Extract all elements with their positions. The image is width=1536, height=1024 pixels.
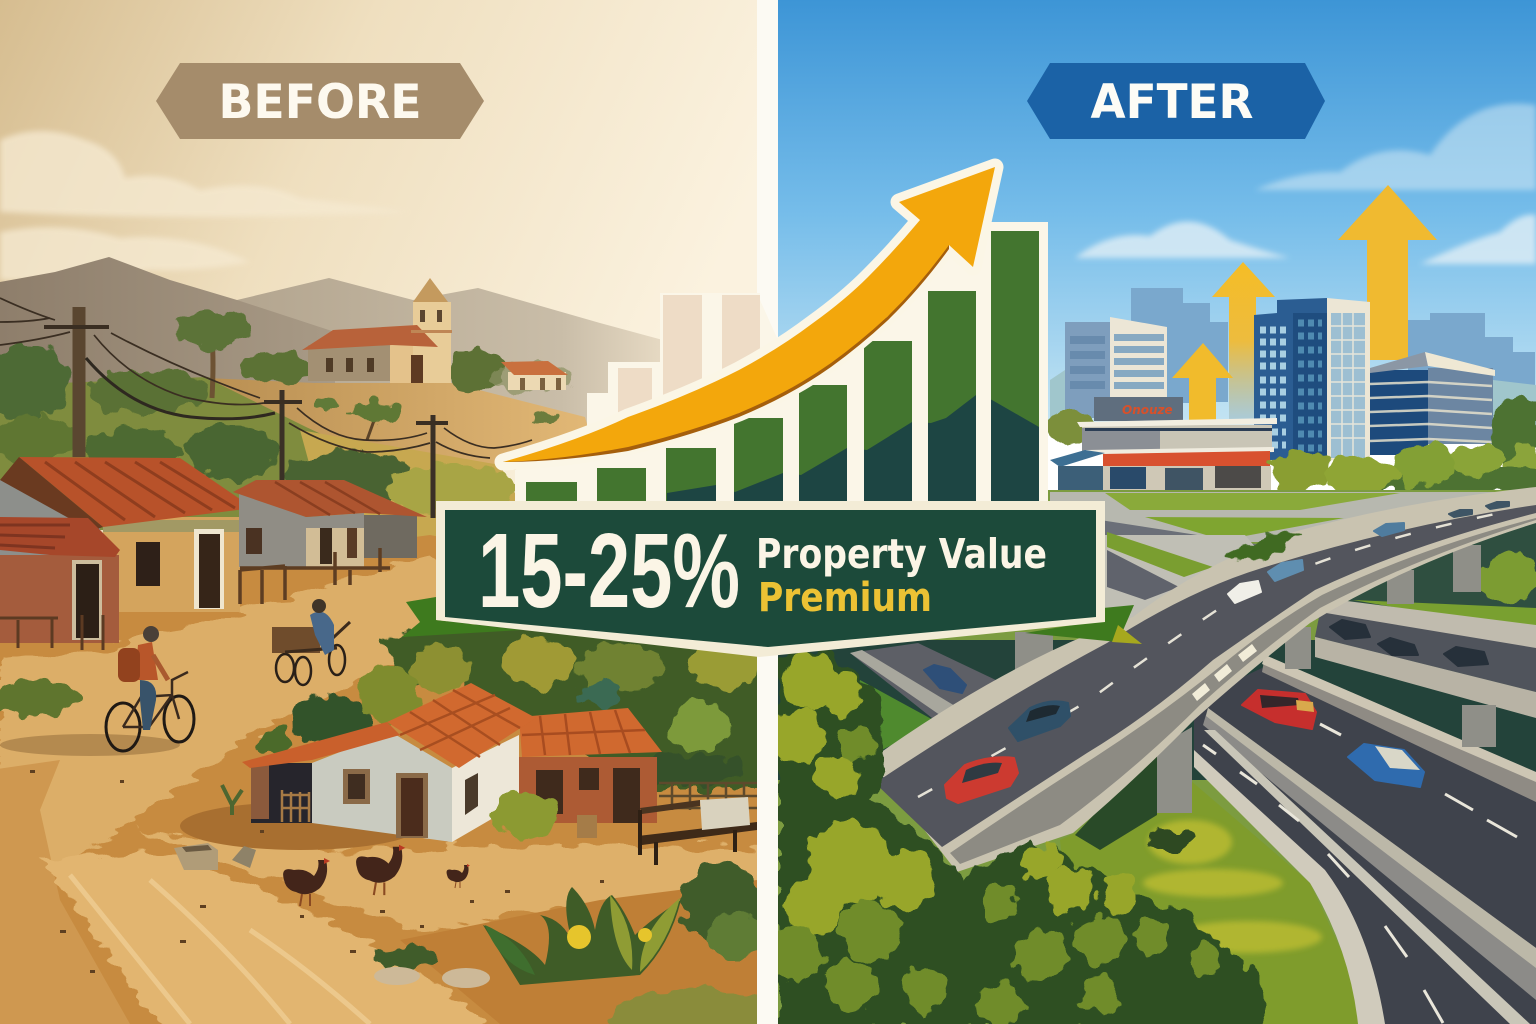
power lines and poles	[0, 298, 532, 518]
bush: corner shrubs	[373, 860, 790, 1024]
trough	[174, 843, 256, 870]
pillars	[1015, 545, 1496, 813]
house: brick annex	[519, 708, 662, 823]
panel: after scene	[767, 0, 1536, 1024]
dirt: cottage shadow	[180, 804, 404, 850]
shadow: under main pillar	[1075, 747, 1157, 850]
label: after: AFTER	[1090, 75, 1254, 130]
panel: before scene	[0, 0, 790, 1024]
bars: green	[526, 231, 1039, 503]
dirt: dark lower left shoulder	[0, 760, 130, 1024]
car: blue hatchback	[1348, 744, 1424, 787]
label: before	[156, 63, 484, 139]
flyover: median band	[950, 518, 1536, 864]
road: lower lane dashes	[1203, 724, 1517, 1023]
arrow: brown shadow edge	[503, 243, 949, 462]
specks: scattered dirt	[30, 770, 604, 973]
house: large stucco house	[0, 457, 253, 612]
median: lower stripe	[1204, 730, 1530, 1024]
road: right branch	[140, 830, 770, 930]
flyover: tiles	[1192, 644, 1257, 701]
bars: dark shaded lower area	[667, 395, 1039, 503]
chart: rising bars	[515, 222, 1048, 510]
cars: traffic	[924, 502, 1509, 803]
house: roadside house	[233, 480, 427, 604]
buildings: distant skyline	[1050, 288, 1536, 430]
hills and fields	[0, 377, 600, 540]
fence: right rail	[659, 783, 757, 810]
flyover: lane dashes	[918, 513, 1500, 797]
car: blue left	[924, 665, 966, 693]
shrub: flyover verge	[1227, 523, 1303, 567]
flyover: asphalt	[875, 505, 1536, 847]
car: dark teal	[1009, 701, 1070, 741]
car: red near	[945, 757, 1018, 803]
road: lower dark carriageway	[1194, 668, 1536, 1024]
road: small left ramp	[850, 643, 1000, 722]
tree: umbrella acacia	[172, 310, 402, 440]
ribbon: right tail	[1025, 605, 1134, 642]
road: main flyover deck	[870, 487, 1536, 872]
ground: lawn and pavement	[778, 490, 1536, 1024]
shoulder: ramp edge	[850, 650, 965, 722]
lawn: under the ramp	[855, 680, 937, 755]
arrow: tall yellow	[1338, 185, 1437, 360]
building: office left	[1065, 317, 1167, 418]
cart with rider	[272, 599, 350, 685]
car: white	[1228, 581, 1261, 603]
trees: hillside forest	[0, 344, 570, 516]
rocks	[374, 967, 490, 988]
label: before: BEFORE	[218, 75, 422, 130]
chickens	[283, 845, 470, 906]
plants: foreground flowers	[483, 887, 681, 985]
ground: dirt	[0, 535, 757, 1024]
label: premium: Premium	[758, 575, 932, 621]
arrow: cream outline	[503, 167, 995, 462]
car: red hatchback	[1242, 690, 1316, 729]
car: distant pair	[1449, 502, 1509, 517]
foliage: foreground trees	[767, 650, 1265, 1024]
car: distant trio	[1374, 523, 1404, 536]
curb: white edge	[1194, 750, 1385, 1024]
lawn: sun patches	[1143, 820, 1322, 953]
house: white cottage	[222, 683, 561, 842]
house: brick house	[0, 517, 120, 650]
clouds: before sky	[0, 131, 410, 281]
big number: 15-25%	[478, 512, 740, 630]
building: low-rise office	[1370, 352, 1495, 455]
car: blue-grey	[1268, 560, 1303, 581]
lawn: centre green	[1060, 780, 1360, 1024]
ribbon: left tail	[402, 597, 521, 637]
trees: behind store and right	[1046, 396, 1536, 494]
road: wheel ruts	[70, 875, 370, 1024]
bushes: roadside greenery	[261, 620, 770, 790]
mountains: distant range	[0, 257, 700, 430]
store: retail building	[1050, 397, 1277, 494]
road: light dirt track upper	[0, 556, 474, 862]
arrow: orange body	[503, 167, 995, 462]
barrier: upper edge of lower carriageway	[1262, 655, 1536, 802]
sky: warm gradient	[0, 0, 757, 533]
sky: blue gradient	[778, 0, 1536, 430]
road: light lower track	[40, 850, 510, 1024]
ladder crate	[577, 815, 597, 838]
barrier: top cap of edge	[1262, 655, 1536, 782]
bench with cloth	[638, 797, 757, 865]
trees: street row	[1270, 442, 1504, 493]
bush: distant right	[1480, 552, 1536, 604]
median: light strip	[1206, 708, 1536, 968]
patch: cyclist shadow	[0, 734, 180, 756]
overpass barrier	[1315, 637, 1536, 718]
dirt: lower right	[400, 880, 757, 1024]
building: blue tower	[1254, 298, 1370, 463]
arrow: medium yellow fading	[1212, 262, 1275, 420]
clouds: after sky	[1075, 104, 1536, 264]
church on the hill	[302, 278, 452, 383]
label: property value: Property Value	[756, 530, 1047, 578]
patch: left shrubs	[0, 680, 83, 716]
divider: white strip	[757, 0, 778, 1024]
cyclist	[106, 626, 194, 751]
arrow: main growth arrow	[503, 167, 995, 462]
house: distant farmhouse	[501, 361, 568, 390]
store sign: Onouze	[1122, 403, 1173, 417]
road: right-hand overpass	[1315, 612, 1536, 692]
label: after	[1027, 63, 1325, 139]
shrub: lawn bush	[1146, 828, 1190, 852]
road: right-hand overpass shoulder	[1320, 600, 1536, 660]
arrow: small yellow	[1172, 343, 1233, 420]
barrier: carriageway median	[1203, 708, 1536, 1000]
banner: premium callout	[436, 501, 1105, 657]
chart: cream backing and ghost towers	[515, 222, 1048, 510]
ribbon: right fold	[1112, 625, 1142, 644]
car: overpass trio	[1330, 620, 1488, 666]
